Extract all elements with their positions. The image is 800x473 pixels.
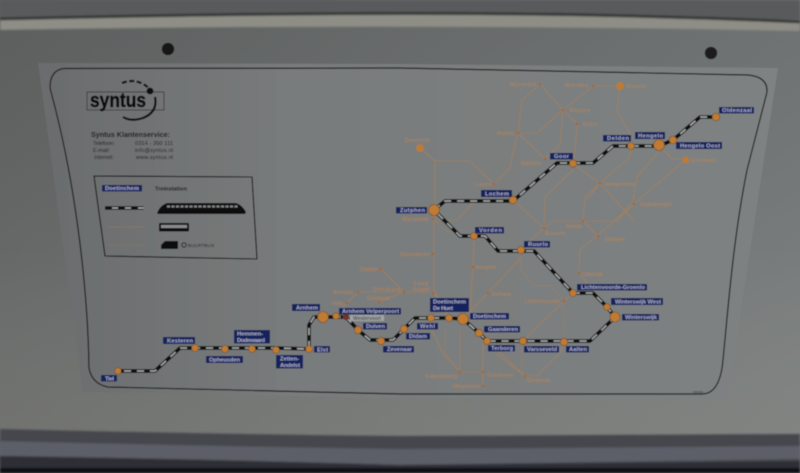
icon: neighbourhood bus (161, 241, 214, 249)
bus stop names: Enschede (691, 158, 716, 164)
label text: Tiel (105, 376, 114, 382)
label text: Winterswijk (625, 315, 658, 321)
legend: neighbourhood bus line (108, 244, 145, 246)
top rail (0, 0, 800, 31)
legend: station label (102, 185, 188, 192)
label text: Goor (554, 154, 570, 160)
text block: customer service: info@syntus.nl (135, 148, 173, 154)
bus stop names: Lichtenvoorde (525, 299, 560, 305)
label text: Varsseveld (527, 347, 557, 353)
bus stop names: Megchelen (453, 384, 480, 390)
bus stop names: Velp (332, 301, 343, 307)
icon: right mounting hole (705, 47, 717, 59)
label text: Andelst (280, 363, 300, 369)
bus stop names: Laren (475, 182, 491, 188)
station labels (101, 107, 754, 382)
text block: customer service: Telefoon: (93, 141, 115, 147)
label text: Doetinchem (433, 300, 466, 306)
bus stop names: Holten (497, 131, 514, 137)
bus stop names: Rijssen (570, 108, 590, 114)
label text: Zevenaar (387, 347, 413, 353)
bus stop names: Neede (566, 224, 582, 230)
label text: Arnhem Velperpoort (342, 309, 399, 315)
label: Westervoort: Westervoort (353, 316, 382, 322)
bottom rail (0, 429, 800, 473)
bus stop nodes (346, 82, 689, 387)
bus stop names: Deventer (405, 138, 430, 144)
bus stop names: Hengevelde (605, 182, 635, 188)
dotted neighbourhood bus lines (433, 219, 564, 376)
label text: Delden (607, 136, 629, 142)
bus stop names: Hengelo (475, 265, 496, 271)
bus stop names (332, 82, 716, 390)
text block: customer service: E-mail: (93, 148, 110, 154)
icon: neighbourhood bus: BUURTBUS (188, 243, 214, 248)
bus stop names: Steenderen (400, 252, 430, 258)
label text: Gaanderen (488, 327, 518, 333)
label text: Ruurlo (528, 242, 548, 248)
bus stop names: Almelo (626, 84, 646, 90)
label text: Vorden (479, 228, 502, 234)
label text: Zetten- (280, 356, 299, 362)
panel: legend (94, 176, 257, 259)
label text: Arnhem (296, 306, 318, 312)
bus stop names: Nijverdal (510, 82, 536, 88)
label text: Aalten (569, 347, 587, 353)
bus stop names: Borculo (545, 231, 565, 237)
label text: Didam (409, 334, 427, 340)
label text: Oldenzaal (722, 108, 752, 114)
label text: Winterswijk West (615, 300, 661, 306)
logo: syntus: syntus (90, 90, 146, 112)
label text (105, 108, 752, 382)
label text: Hengelo (638, 134, 663, 140)
label text: Hengelo Oost (680, 144, 720, 150)
bus stop names: Markelo (521, 161, 541, 167)
bus network lines (336, 84, 686, 386)
bus stop names: Keppel (413, 287, 430, 293)
label text: Elst (317, 348, 328, 354)
icon: left mounting hole (162, 43, 174, 55)
bus stop names: Haaksbergen (640, 202, 672, 208)
bus stop names: Dinxperlo (527, 378, 550, 384)
legend: bus line (108, 226, 145, 228)
bus stop names: 's-Heerenberg (425, 374, 457, 380)
text block: customer service: 0314 - 350 111 (135, 141, 173, 147)
label text: Kesteren (167, 338, 193, 344)
label text: Dodewaard (237, 338, 265, 344)
label text: Zutphen (400, 208, 425, 214)
label text: Opheusden (209, 358, 240, 364)
train line (118, 117, 716, 371)
bus stop names: Giesbeek (367, 296, 390, 302)
bus stop names: Enter (583, 122, 598, 128)
train stations (115, 113, 720, 374)
label text: Hemmen- (237, 332, 263, 338)
text block: customer service (91, 130, 173, 161)
bus stop names: Warnsveld (402, 217, 428, 223)
legend: station label: Doetinchem (105, 186, 139, 192)
legend: station label: Treinstation (155, 186, 188, 192)
label text: Doetinchem (473, 314, 506, 320)
logo: syntus (87, 81, 164, 120)
bus stop names: Sinderen (487, 373, 513, 379)
bus stop names: Zelhem (492, 292, 511, 298)
label text: Wehl (420, 324, 435, 330)
bus stop names: Laag (414, 281, 428, 287)
text block: customer service: Internet: (94, 155, 114, 161)
bus stop names: Rheden (333, 290, 353, 296)
text block: customer service: www.syntus.nl (135, 155, 173, 161)
icon: train (157, 203, 246, 214)
text block: customer service: Syntus Klantenservice: (91, 130, 170, 139)
label text: Lochem (485, 192, 509, 198)
panel: route map sheet (38, 63, 778, 400)
bus stop names: Zeddam (360, 267, 378, 273)
bus stop names: Doesburg (373, 287, 400, 293)
bus stop names: Ostervijk (583, 272, 603, 278)
bus stop names: Eibergen (605, 237, 625, 243)
bus stop names: Wierden (565, 83, 588, 89)
label text: Terborg (491, 346, 513, 352)
label text: De Huet (433, 306, 453, 312)
icon: bus (159, 223, 189, 232)
label text: Duiven (366, 324, 385, 330)
label text: Lichtenvoorde-Groenlo (581, 285, 645, 291)
legend: train line (105, 206, 144, 210)
